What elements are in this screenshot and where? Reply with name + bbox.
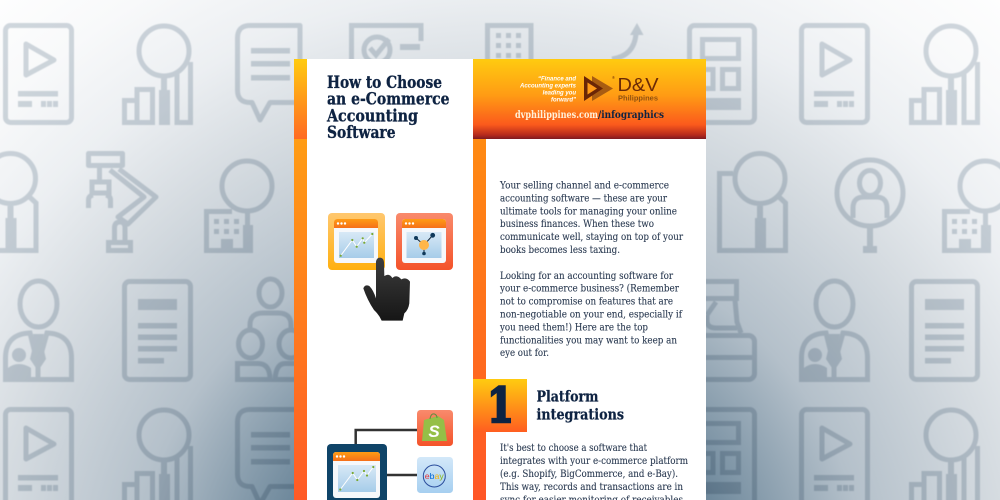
- section text: It's best to choose a software that: [500, 442, 648, 454]
- intro text: your e-commerce business? (Remember: [499, 283, 679, 295]
- icon: ebay badge: ebay: [425, 471, 445, 481]
- intro text: Your selling channel and e-commerce: [499, 180, 669, 192]
- red window card: [396, 213, 453, 270]
- intro text: functionalities you may want to keep an: [500, 334, 677, 346]
- section text: (e.g. Shopify, BigCommerce, and e-Bay).: [500, 468, 678, 480]
- connector lines: [356, 430, 417, 475]
- intro text: communicate well, staying on top of your: [500, 231, 683, 243]
- illustration: software windows and pointing hand: [328, 213, 453, 321]
- intro text: books becomes less taxing.: [500, 244, 620, 256]
- tagline: leading you: [543, 90, 576, 96]
- icon: shopify bag: S: [428, 422, 440, 441]
- tagline: “Finance and: [538, 76, 576, 82]
- logo wordmark: D&V: [618, 75, 658, 95]
- website url: dvphilippines.com: [515, 110, 598, 121]
- software window: [327, 444, 387, 500]
- section heading: Platform: [536, 388, 599, 406]
- intro text: [499, 180, 683, 359]
- section text: [500, 442, 688, 500]
- section heading: [536, 388, 624, 423]
- intro text: ultimate tools for managing your online: [500, 205, 677, 217]
- logo wordmark: Philippines: [618, 94, 658, 102]
- title: an e-Commerce: [327, 90, 450, 110]
- section text: This way, records and transactions are in: [500, 481, 683, 493]
- title: Accounting: [326, 106, 418, 126]
- tagline: [519, 76, 577, 104]
- logo block: [519, 75, 658, 104]
- website url: /infographics: [598, 110, 664, 121]
- section text: integrates with your e-commerce platform: [500, 455, 688, 467]
- title: Software: [327, 123, 396, 143]
- intro text: accounting software — these are your: [500, 192, 667, 204]
- tagline: forward”: [551, 98, 576, 104]
- title: How to Choose: [327, 73, 442, 93]
- logo wordmark: [612, 75, 658, 102]
- icon: logo arrows: [584, 76, 613, 101]
- intro text: business finances. When these two: [500, 218, 654, 230]
- illustration: platform integrations: [327, 410, 453, 500]
- orange window card: [328, 213, 385, 270]
- number badge 1: 1: [487, 378, 514, 434]
- header band: [473, 59, 706, 139]
- panel: infographic page: [294, 59, 706, 500]
- intro text: Looking for an accounting software for: [500, 270, 673, 282]
- title: [326, 73, 450, 143]
- intro text: you need them!) Here are the top: [499, 321, 648, 333]
- icon: pointing hand: [363, 258, 410, 321]
- website url: [515, 110, 664, 121]
- logo wordmark: ®: [612, 75, 615, 80]
- number badge 1: [473, 378, 527, 434]
- intro text: eye out for.: [500, 347, 549, 359]
- intro text: non-negotiable on your end, especially if: [500, 308, 683, 320]
- tagline: Accounting experts: [519, 84, 577, 90]
- intro text: not to compromise on features that are: [500, 296, 673, 308]
- section heading: integrations: [536, 405, 624, 423]
- left orange strip: [294, 59, 307, 500]
- middle orange strip: [473, 139, 486, 500]
